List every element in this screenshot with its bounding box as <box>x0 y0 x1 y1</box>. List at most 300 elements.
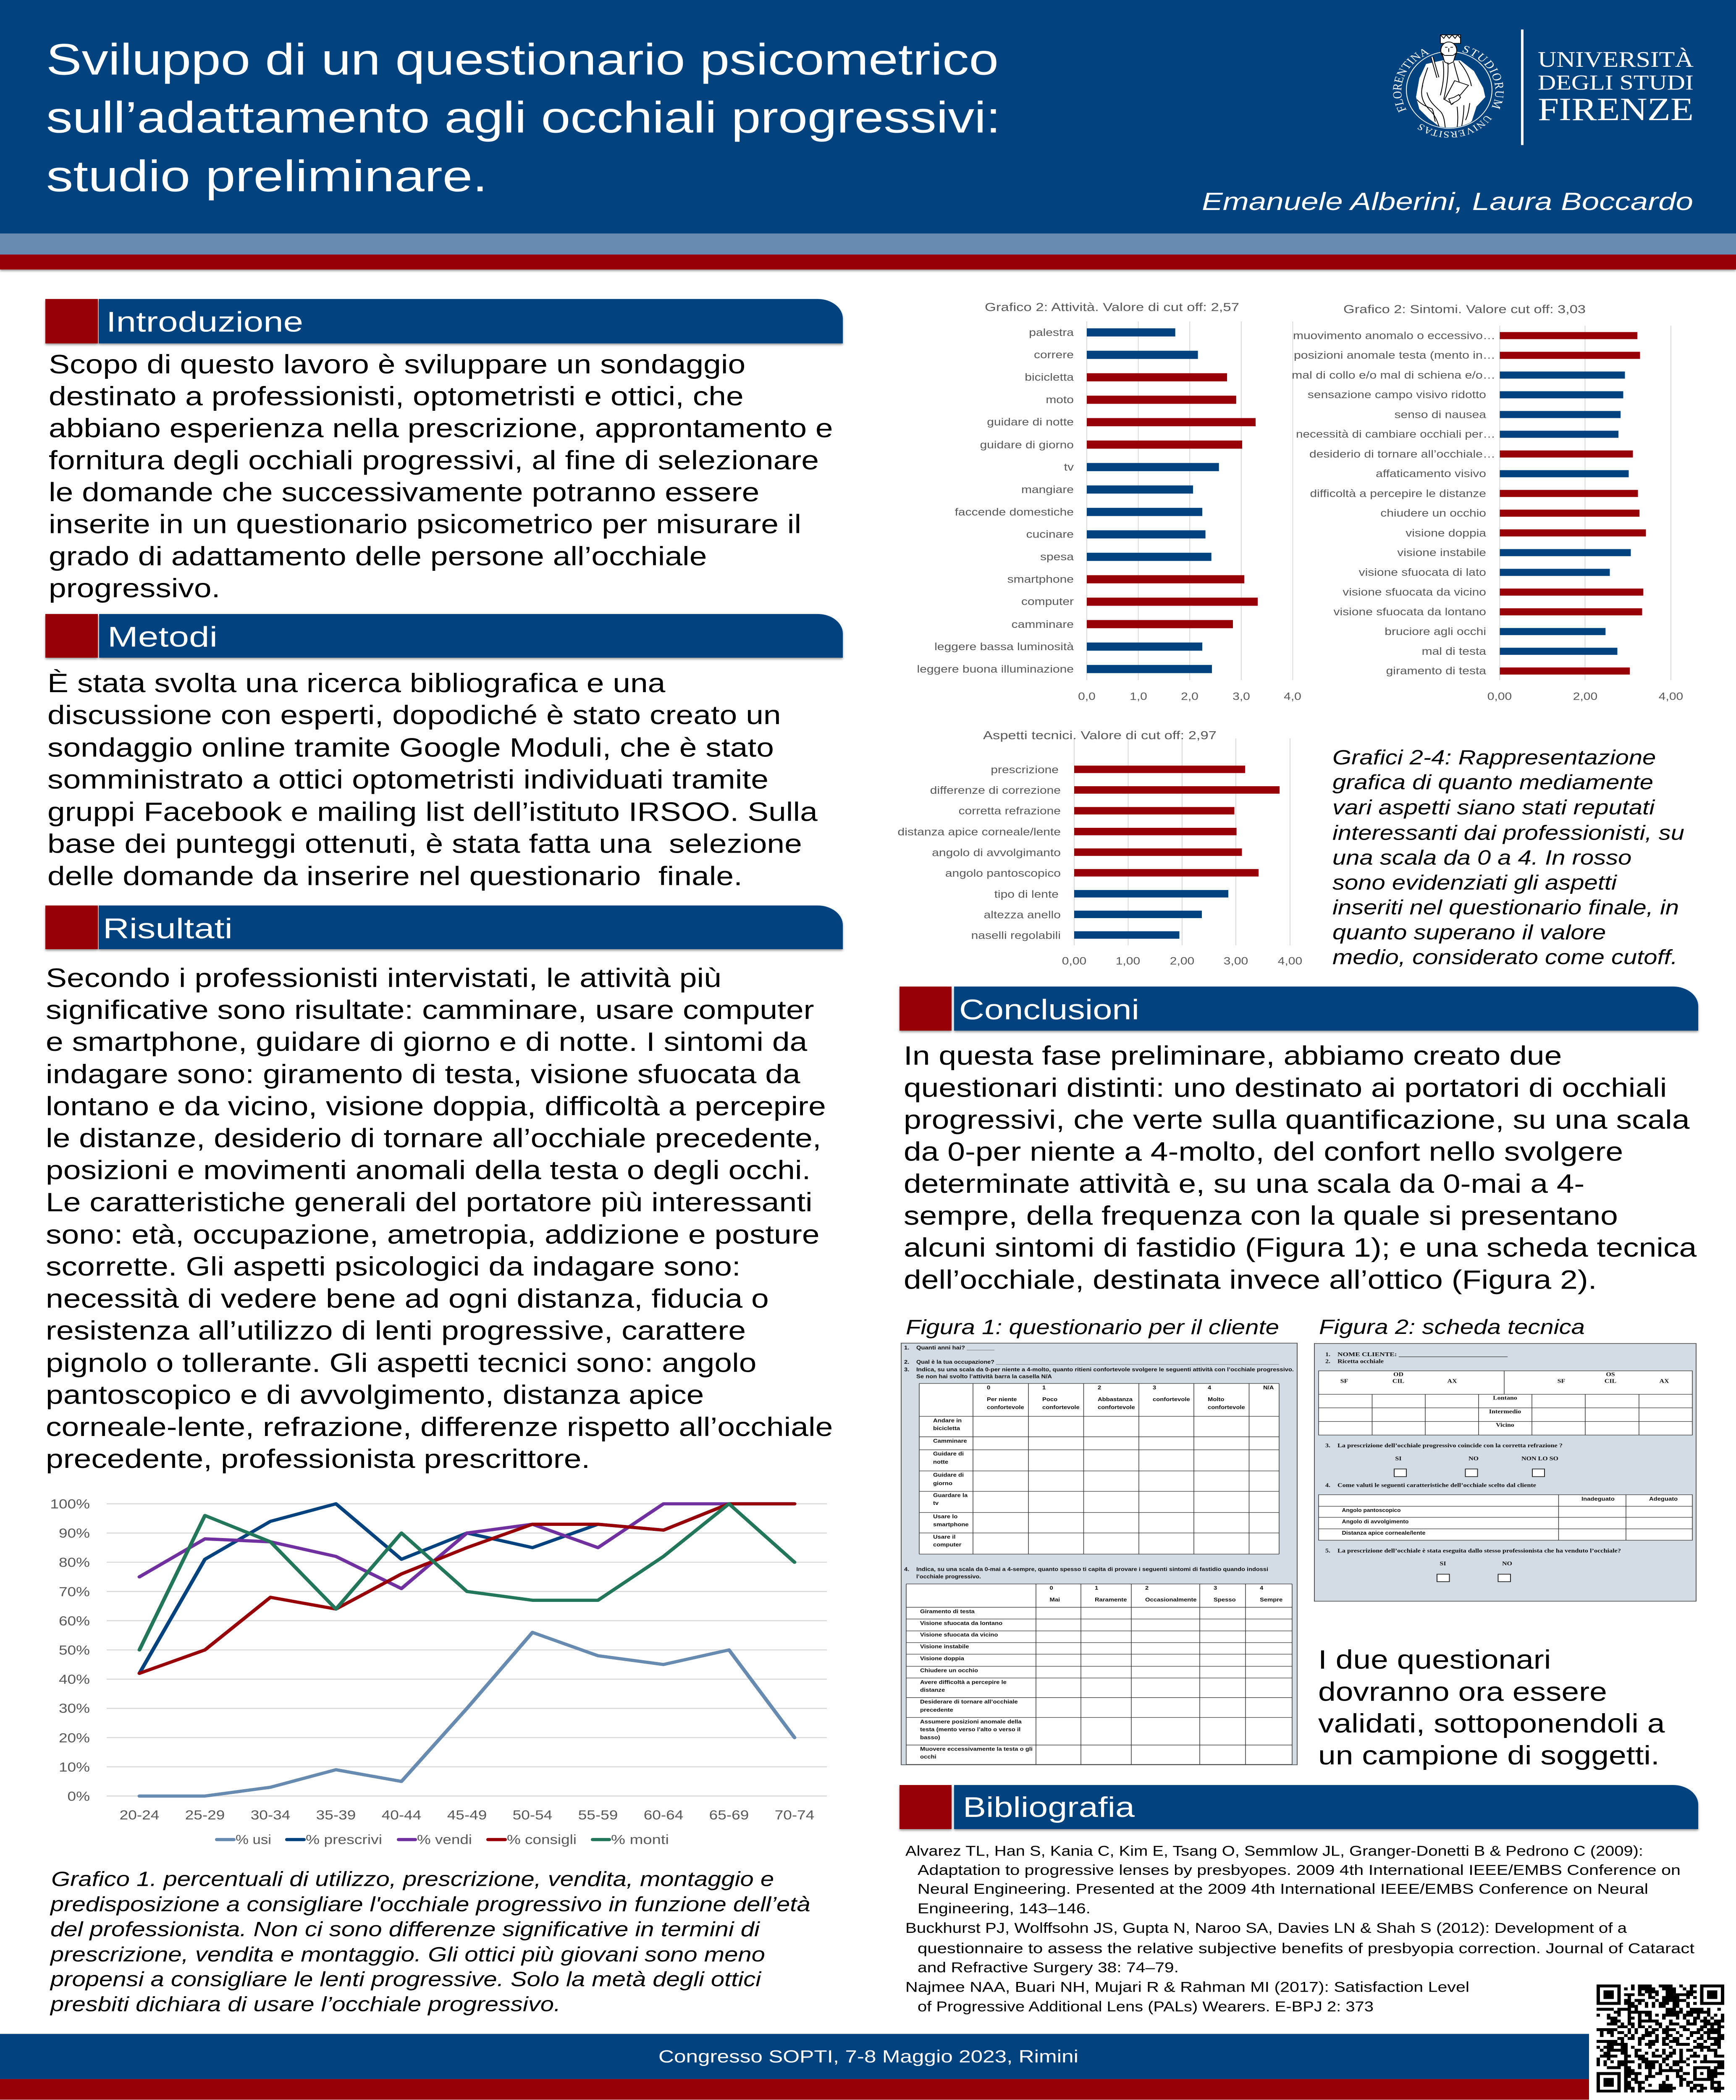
text block: risultati: le distanze, desiderio di tornare all’occhiale precedente, <box>46 1123 821 1153</box>
text block: introduzione <box>49 349 833 603</box>
table: sintomi: Giramento di testa <box>920 1609 975 1614</box>
text block: conclusioni: sempre, della frequenza con la quale si presentano <box>904 1200 1618 1231</box>
text block: conclusioni <box>904 1041 1697 1294</box>
value axis: 0,0 <box>1078 690 1096 702</box>
table: attività: Per niente <box>987 1396 1017 1402</box>
x axis labels: 30-34 <box>251 1808 290 1822</box>
panel: risultati <box>45 906 843 1474</box>
value axis: 1,0 <box>1130 690 1147 702</box>
caption: grafici 2-4: medio, considerato come cutoff. <box>1332 946 1678 969</box>
table: attività: confortevole <box>1042 1404 1080 1410</box>
text block: validazione: dovranno ora essere <box>1318 1677 1607 1706</box>
activity labels: camminare <box>1012 618 1074 630</box>
table: attività: 2 <box>1098 1385 1101 1391</box>
question 3: SI <box>1395 1456 1402 1462</box>
value axis: 4,00 <box>1278 955 1302 967</box>
question 4: 4. <box>904 1567 909 1572</box>
text block: risultati: e smartphone, guidare di giorno e di notte. I sintomi da <box>46 1027 808 1057</box>
activity labels: faccende domestiche <box>955 506 1074 518</box>
y axis labels: 10% <box>59 1760 90 1774</box>
text block: risultati: precedente, professionista prescrittore. <box>46 1444 590 1474</box>
caption: grafici 2-4: sono evidenziati gli aspetti <box>1332 871 1618 894</box>
table: sintomi: 2 <box>1145 1585 1149 1591</box>
text block: metodi: discussione con esperti, dopodiché è stato creato un <box>47 700 781 730</box>
legend <box>215 1832 669 1847</box>
table: sintomi: Assumere posizioni anomale della <box>920 1719 1022 1725</box>
title: sull’adattamento agli occhiali progressivi: <box>46 93 1001 142</box>
footer banner <box>0 2034 1589 2100</box>
value axis: 3,00 <box>1224 955 1248 967</box>
text block: risultati: posizioni e movimenti anomali della testa o degli occhi. <box>46 1155 810 1185</box>
question 4: l’occhiale progressivo. <box>916 1574 981 1580</box>
title: Sviluppo di un questionario psicometrico <box>46 35 999 84</box>
text block: introduzione: progressivo. <box>49 573 220 603</box>
table: ricetta: AX <box>1447 1378 1457 1384</box>
fields 1-2: NOME CLIENTE: ______________________________ <box>1337 1352 1508 1358</box>
value axis: 2,00 <box>1170 955 1194 967</box>
text block: introduzione: destinato a professionisti, optometristi e ottici, che <box>49 381 744 411</box>
question 5: La prescrizione dell’occhiale è stata eseguita dallo stesso professionista che ha venduto l’occhiale? <box>1337 1548 1621 1554</box>
table: attività: Poco <box>1042 1396 1057 1402</box>
y axis labels <box>50 1497 90 1804</box>
references: questionnaire to assess the relative subjective benefits of presbyopia correction. Journal of Cataract <box>918 1940 1695 1956</box>
text block: risultati: significative sono risultate: camminare, usare computer <box>46 995 814 1025</box>
table: sintomi: Muovere eccessivamente la testa o gli <box>920 1746 1033 1752</box>
text block: risultati: resistenza all’utilizzo di lenti progressive, carattere <box>46 1315 746 1345</box>
x axis labels: 60-64 <box>644 1808 683 1822</box>
value axis <box>1078 690 1301 702</box>
caption: grafici 2-4: una scala da 0 a 4. In rosso <box>1332 846 1631 869</box>
activity labels: spesa <box>1040 551 1074 562</box>
icon: QR code <box>1597 1984 1724 2092</box>
technical labels: distanza apice corneale/lente <box>898 826 1061 838</box>
table: ricetta: SF <box>1558 1378 1565 1384</box>
table: attività: confortevole <box>1153 1396 1190 1402</box>
question 4: Come valuti le seguenti caratteristiche dell’occhiale scelto dal cliente <box>1337 1483 1536 1488</box>
caption: grafico 1: Grafico 1. percentuali di utilizzo, prescrizione, vendita, montaggio e <box>51 1868 774 1890</box>
chart title: Aspetti tecnici. Valore di cut off: 2,97 <box>983 729 1217 742</box>
heading: bibliografia <box>899 1785 1698 1829</box>
table: ricetta <box>1319 1371 1692 1435</box>
heading: conclusioni: Conclusioni <box>959 994 1139 1025</box>
technical labels: differenze di correzione <box>930 784 1061 796</box>
icon: university seal: FLORENTINA <box>1390 45 1431 114</box>
text block: conclusioni: In questa fase preliminare, abbiamo creato due <box>904 1041 1562 1071</box>
x axis labels: 40-44 <box>382 1808 421 1822</box>
text block: risultati: scorrette. Gli aspetti psicologici da indagare sono: <box>46 1252 741 1281</box>
table: attività: confortevole <box>1208 1404 1245 1410</box>
fields 1-2: 2. <box>1325 1358 1330 1365</box>
symptom bars <box>1500 332 1646 675</box>
text block: metodi: delle domande da inserire nel questionario finale. <box>47 861 742 891</box>
chart title: Grafico 2: Sintomi. Valore cut off: 3,03 <box>1343 303 1586 316</box>
table: attività: 4 <box>1208 1385 1212 1391</box>
legend: % prescrivi <box>306 1832 382 1847</box>
symptom labels: difficoltà a percepire le distanze <box>1310 487 1486 499</box>
table: ricetta: OD <box>1393 1372 1403 1378</box>
heading: risultati: Risultati <box>103 913 233 944</box>
bar chart: attività <box>917 301 1301 702</box>
icon: university seal: STUDIORUM <box>1460 43 1506 111</box>
panel: figura 1 questionario <box>901 1343 1297 1765</box>
technical labels: altezza anello <box>984 909 1061 921</box>
symptom labels: senso di nausea <box>1395 409 1487 420</box>
table: attività: 0 <box>987 1385 991 1391</box>
text block: validazione <box>1318 1645 1665 1770</box>
question 5 <box>1325 1548 1621 1582</box>
table: sintomi: Visione sfuocata da vicino <box>920 1632 998 1638</box>
references <box>905 1843 1695 2015</box>
table: caratteristiche: Adeguato <box>1649 1496 1678 1502</box>
symptom labels: chiudere un occhio <box>1380 507 1486 519</box>
heading: metodi <box>45 614 843 658</box>
text block: conclusioni: determinate attività e, su una scala da 0-mai a 4- <box>904 1168 1584 1199</box>
x axis labels: 25-29 <box>185 1808 225 1822</box>
conference name: Congresso SOPTI, 7-8 Maggio 2023, Rimini <box>658 2047 1078 2066</box>
table: ricetta: Lontano <box>1493 1395 1517 1401</box>
x axis labels: 70-74 <box>775 1808 814 1822</box>
table: attività: Guidare di <box>933 1451 964 1457</box>
text block: validazione: un campione di soggetti. <box>1318 1740 1660 1770</box>
fields 1-2: Ricetta occhiale <box>1337 1358 1384 1365</box>
text block: metodi: È stata svolta una ricerca bibliografica e una <box>47 668 666 698</box>
table: sintomi: 0 <box>1050 1585 1053 1591</box>
activity labels: correre <box>1034 349 1074 361</box>
logo: Università degli Studi di Firenze <box>1390 29 1694 145</box>
symptom labels: visione doppia <box>1406 527 1487 539</box>
symptom labels: muovimento anomalo o eccessivo… <box>1293 330 1495 341</box>
table: caratteristiche <box>1319 1495 1692 1540</box>
symptom labels: posizioni anomale testa (mento in… <box>1294 349 1495 361</box>
text block: introduzione: fornitura degli occhiali progressivi, al fine di selezionare <box>49 445 819 475</box>
logo wordmark: FIRENZE <box>1538 92 1694 127</box>
technical bars <box>1074 766 1280 939</box>
table: sintomi: Desiderare di tornare all’occhiale <box>920 1699 1018 1705</box>
table: caratteristiche: Inadeguato <box>1581 1496 1615 1502</box>
references: Neural Engineering. Presented at the 2009 4th International IEEE/EMBS Conference on Neural <box>918 1881 1648 1897</box>
y axis labels: 50% <box>59 1643 90 1658</box>
table: sintomi: Spesso <box>1214 1597 1236 1603</box>
table: sintomi: distanze <box>920 1687 945 1693</box>
question 3 <box>1325 1443 1563 1477</box>
authors: Emanuele Alberini, Laura Boccardo <box>1202 187 1693 215</box>
table: attività: smartphone <box>933 1522 969 1528</box>
panel: metodi <box>45 614 843 891</box>
questions 1-3: Qual è la tua occupazione? ____________________________________________________________________________________ <box>916 1359 1279 1365</box>
text block: introduzione: inserite in un questionario psicometrico per misurare il <box>49 509 801 539</box>
y axis labels: 20% <box>59 1731 90 1746</box>
table: caratteristiche: Angolo di avvolgimento <box>1342 1519 1409 1525</box>
panel: figura 2 scheda tecnica <box>1314 1344 1696 1601</box>
question 5: NO <box>1502 1561 1512 1567</box>
activity labels: smartphone <box>1007 573 1074 585</box>
table: ricetta: AX <box>1659 1378 1669 1384</box>
caption: grafico 1: del professionista. Non ci sono differenze significative in termini di <box>50 1918 760 1941</box>
table: sintomi: Chiudere un occhio <box>920 1667 978 1673</box>
text block: risultati: lontano e da vicino, visione doppia, difficoltà a percepire <box>46 1091 826 1121</box>
panel: conclusioni <box>899 987 1698 1294</box>
technical labels: angolo di avvolgimanto <box>932 846 1061 858</box>
table: sintomi: Raramente <box>1095 1597 1127 1603</box>
x axis labels: 35-39 <box>316 1808 356 1822</box>
text block: risultati: corneale-lente, refrazione, differenze rispetto all’occhiale <box>46 1412 833 1442</box>
text block: validazione: validati, sottoponendoli a <box>1318 1708 1665 1738</box>
references: Engineering, 143–146. <box>918 1900 1091 1916</box>
table: attività: Usare il <box>933 1534 955 1540</box>
table: sintomi: Visione doppia <box>920 1656 964 1662</box>
icon: university seal: UNIVERSITAS <box>1415 113 1494 139</box>
text block: metodi: sondaggio online tramite Google Moduli, che è stato <box>47 732 774 762</box>
questions 1-3 <box>904 1345 1294 1379</box>
table: sintomi: Occasionalmente <box>1145 1597 1197 1603</box>
text block: conclusioni: dell’occhiale, destinata invece all’ottico (Figura 2). <box>904 1265 1597 1294</box>
symptom labels: desiderio di tornare all’occhiale… <box>1309 448 1495 460</box>
caption: figura 1: Figura 1: questionario per il cliente <box>906 1316 1279 1339</box>
x axis labels <box>120 1808 814 1822</box>
table: sintomi: precedente <box>920 1707 953 1713</box>
text block: introduzione: abbiano esperienza nella prescrizione, approntamento e <box>49 413 833 443</box>
table: attività: computer <box>933 1542 962 1548</box>
text block: metodi: gruppi Facebook e mailing list dell’istituto IRSOO. Sulla <box>47 797 818 827</box>
bar chart: sintomi <box>1292 303 1683 702</box>
activity labels: tv <box>1064 461 1074 473</box>
text block: risultati: pignolo o tollerante. Gli aspetti tecnici sono: angolo <box>46 1348 756 1378</box>
table: attività: notte <box>933 1459 949 1465</box>
table: ricetta: CIL <box>1392 1378 1404 1384</box>
heading: bibliografia: Bibliografia <box>963 1791 1135 1823</box>
symptom labels <box>1292 330 1495 677</box>
y axis labels: 60% <box>59 1614 90 1628</box>
table: sintomi: 1 <box>1095 1585 1099 1591</box>
legend: % usi <box>236 1832 271 1847</box>
symptom labels: mal di testa <box>1422 645 1487 657</box>
references: Adaptation to progressive lenses by presbyopes. 2009 4th International IEEE/EMBS Conference on <box>918 1862 1681 1878</box>
table: sintomi: testa (mento verso l’alto o verso il <box>920 1727 1020 1732</box>
symptom labels: giramento di testa <box>1386 665 1487 677</box>
legend: % monti <box>611 1832 669 1847</box>
question 3: NON LO SO <box>1521 1456 1558 1462</box>
activity labels <box>917 326 1074 675</box>
value axis: 3,0 <box>1233 690 1250 702</box>
activity labels: guidare di giorno <box>980 439 1074 451</box>
table: caratteristiche: Angolo pantoscopico <box>1342 1507 1400 1513</box>
symptom labels: affaticamento visivo <box>1376 467 1486 479</box>
questions 1-3: Se non hai svolto l’attività barra la casella N/A <box>916 1374 1052 1379</box>
data series <box>139 1504 795 1796</box>
table: sintomi <box>906 1584 1292 1764</box>
table: sintomi: basso) <box>920 1735 940 1740</box>
text block: metodi: base dei punteggi ottenuti, è stata fatta una selezione <box>47 829 802 858</box>
value axis: 1,00 <box>1116 955 1140 967</box>
questions 1-3: 2. <box>904 1359 909 1365</box>
heading: conclusioni <box>899 987 1698 1031</box>
text block: introduzione: Scopo di questo lavoro è sviluppare un sondaggio <box>49 349 745 379</box>
question 5: SI <box>1440 1561 1446 1567</box>
caption: grafici 2-4: inseriti nel questionario finale, in <box>1332 896 1679 919</box>
heading: introduzione <box>45 299 843 344</box>
technical labels: tipo di lente <box>994 888 1059 900</box>
x axis labels: 55-59 <box>578 1808 618 1822</box>
header banner <box>0 0 1736 270</box>
table: sintomi: 4 <box>1260 1585 1264 1591</box>
text block: risultati: sono: età, occupazione, ametropia, addizione e posture <box>46 1219 820 1250</box>
panel: introduzione <box>45 299 843 603</box>
question 4: 4. <box>1325 1483 1330 1488</box>
table: attività: tv <box>933 1500 939 1506</box>
table: sintomi: 3 <box>1214 1585 1217 1591</box>
table: ricetta: Intermedio <box>1489 1409 1521 1415</box>
x axis labels: 50-54 <box>513 1808 552 1822</box>
title: studio preliminare. <box>46 152 488 201</box>
references: and Refractive Surgery 38: 74–79. <box>918 1959 1179 1975</box>
question 4 <box>904 1567 1268 1580</box>
question 4: Indica, su una scala da 0-mai a 4-sempre, quanto spesso ti capita di provare i seguenti sintomi di fastidio quando indossi <box>916 1567 1268 1572</box>
table: attività: 3 <box>1153 1385 1156 1391</box>
line chart: grafico 1 <box>50 1497 827 1847</box>
question 5: 5. <box>1325 1548 1330 1554</box>
caption: grafico 1 <box>50 1868 810 2016</box>
value axis: 4,00 <box>1659 690 1683 702</box>
table: ricetta: SF <box>1340 1378 1348 1384</box>
questions 1-3: Quanti anni hai? ________ <box>916 1345 994 1351</box>
table: sintomi: Visione instabile <box>920 1644 969 1649</box>
text block: introduzione: le domande che successivamente potranno essere <box>49 477 759 507</box>
table: attività: Molto <box>1208 1396 1224 1402</box>
activity bars <box>1087 328 1258 673</box>
activity labels: mangiare <box>1021 483 1074 496</box>
references: Najmee NAA, Buari NH, Mujari R & Rahman MI (2017): Satisfaction Level <box>905 1979 1469 1995</box>
table: sintomi: Visione sfuocata da lontano <box>920 1620 1002 1626</box>
table: sintomi: Mai <box>1050 1597 1060 1603</box>
symptom labels: visione sfuocata di lato <box>1359 566 1486 578</box>
text block: conclusioni: da 0-per niente a 4-molto, del confort nello svolgere <box>904 1137 1623 1166</box>
y axis labels: 80% <box>59 1555 90 1570</box>
activity labels: palestra <box>1029 326 1074 338</box>
table: attività: giorno <box>933 1480 952 1486</box>
table: attività: 1 <box>1042 1385 1046 1391</box>
table: attività: Camminare <box>933 1438 967 1444</box>
symptom labels: visione sfuocata da vicino <box>1343 586 1486 598</box>
value axis <box>1062 955 1302 967</box>
activity labels: guidare di notte <box>987 416 1074 428</box>
table: sintomi: Sempre <box>1260 1597 1283 1603</box>
title <box>46 35 1001 201</box>
value axis: 2,00 <box>1573 690 1597 702</box>
caption: grafici 2-4: quanto superano il valore <box>1332 921 1606 944</box>
table: attività: Guardare la <box>933 1492 968 1498</box>
table: attività: Andare in <box>933 1418 962 1423</box>
logo wordmark: UNIVERSITÀ <box>1538 47 1694 72</box>
caption: grafico 1: predisposizione a consigliare l'occhiale progressivo in funzione dell’età <box>50 1893 810 1916</box>
symptom labels: visione sfuocata da lontano <box>1334 606 1486 618</box>
table: attività: confortevole <box>987 1404 1024 1410</box>
questions 1-3: 1. <box>904 1345 909 1351</box>
text block: risultati: Le caratteristiche generali del portatore più interessanti <box>46 1187 813 1217</box>
text block: risultati <box>46 963 833 1474</box>
value axis: 0,00 <box>1062 955 1086 967</box>
activity labels: cucinare <box>1026 528 1074 540</box>
table: attività: N/A <box>1263 1385 1274 1391</box>
text block: risultati: pantoscopico e di avvolgimento, distanza apice <box>46 1380 704 1410</box>
heading: introduzione: Introduzione <box>106 306 303 338</box>
y axis labels: 0% <box>68 1789 90 1804</box>
x axis labels: 65-69 <box>709 1808 749 1822</box>
icon: university seal <box>1390 35 1506 139</box>
text block: metodi: somministrato a ottici optometristi individuati tramite <box>47 764 768 794</box>
table: sintomi: occhi <box>920 1754 936 1760</box>
question 3: NO <box>1469 1456 1479 1462</box>
legend: % vendi <box>417 1832 472 1847</box>
text block: metodi <box>47 668 818 891</box>
caption: grafico 1: propensi a consigliare le lenti progressive. Solo la metà degli ottici <box>50 1968 762 1991</box>
question 3: 3. <box>1325 1443 1330 1449</box>
logo wordmark: DEGLI STUDI <box>1538 71 1694 94</box>
chart title: Grafico 2: Attività. Valore di cut off: 2,57 <box>985 301 1239 314</box>
table: attività: confortevole <box>1098 1404 1135 1410</box>
caption: grafici 2-4: interessanti dai professionisti, su <box>1332 821 1684 844</box>
caption: figura 2: Figura 2: scheda tecnica <box>1319 1315 1585 1339</box>
technical labels <box>898 764 1061 941</box>
table: ricetta: OS <box>1606 1372 1615 1378</box>
symptom labels: necessità di cambiare occhiali per… <box>1296 428 1495 440</box>
technical labels: prescrizione <box>991 764 1059 776</box>
table: attività: Guidare di <box>933 1472 964 1478</box>
text block: risultati: Secondo i professionisti intervistati, le attività più <box>46 963 721 992</box>
activity labels: leggere bassa luminosità <box>934 640 1074 653</box>
question 3: La prescrizione dell’occhiale progressivo coincide con la corretta refrazione ? <box>1337 1443 1563 1449</box>
y axis labels: 30% <box>59 1701 90 1716</box>
references: Alvarez TL, Han S, Kania C, Kim E, Tsang O, Semmlow JL, Granger-Donetti B & Pedrono C (2009): <box>905 1843 1643 1859</box>
text block: conclusioni: questionari distinti: uno destinato ai portatori di occhiali <box>904 1073 1667 1102</box>
caption: grafico 1: presbiti dichiara di usare l’occhiale progressivo. <box>50 1993 561 2016</box>
legend: % consigli <box>507 1832 577 1847</box>
text block: risultati: indagare sono: giramento di testa, visione sfuocata da <box>46 1059 800 1089</box>
activity labels: leggere buona illuminazione <box>917 663 1074 675</box>
text block: risultati: necessità di vedere bene ad ogni distanza, fiducia o <box>46 1284 769 1313</box>
fields 1-2: 1. <box>1325 1352 1330 1358</box>
heading: risultati <box>45 906 843 949</box>
fields 1-2 <box>1325 1352 1508 1365</box>
text block: conclusioni: progressivi, che verte sulla quantificazione, su una scala <box>904 1105 1690 1134</box>
caption: grafici 2-4: vari aspetti siano stati reputati <box>1332 796 1655 819</box>
text block: introduzione: grado di adattamento delle persone all’occhiale <box>49 541 707 571</box>
table: caratteristiche: Distanza apice corneale/lente <box>1342 1530 1426 1536</box>
symptom labels: bruciore agli occhi <box>1385 625 1486 637</box>
panel: bibliografia <box>899 1785 1698 2015</box>
table: ricetta: CIL <box>1605 1378 1616 1384</box>
y axis labels: 90% <box>59 1526 90 1541</box>
caption: grafici 2-4 <box>1332 746 1684 969</box>
y axis labels: 100% <box>50 1497 90 1512</box>
value axis: 4,0 <box>1284 690 1301 702</box>
divider line <box>1521 29 1524 145</box>
bar chart: aspetti tecnici <box>898 729 1302 967</box>
symptom labels: visione instabile <box>1397 546 1486 558</box>
value axis: 2,0 <box>1181 690 1198 702</box>
questions 1-3: 3. <box>904 1367 909 1373</box>
heading: metodi: Metodi <box>108 621 218 653</box>
text block: validazione: I due questionari <box>1318 1645 1551 1675</box>
table: ricetta: Vicino <box>1496 1422 1514 1428</box>
technical labels: angolo pantoscopico <box>945 867 1061 879</box>
activity labels: computer <box>1021 596 1074 607</box>
caption: grafici 2-4: grafica di quanto mediamente <box>1332 771 1653 794</box>
technical labels: naselli regolabili <box>971 929 1061 941</box>
value axis <box>1487 690 1683 702</box>
questions 1-3: Indica, su una scala da 0-per niente a 4-molto, quanto ritieni confortevole svolgere le seguenti attività con l’occhiale progressivo. <box>916 1367 1294 1373</box>
caption: grafici 2-4: Grafici 2-4: Rappresentazione <box>1332 746 1656 769</box>
table: attività: Abbastanza <box>1098 1396 1133 1402</box>
